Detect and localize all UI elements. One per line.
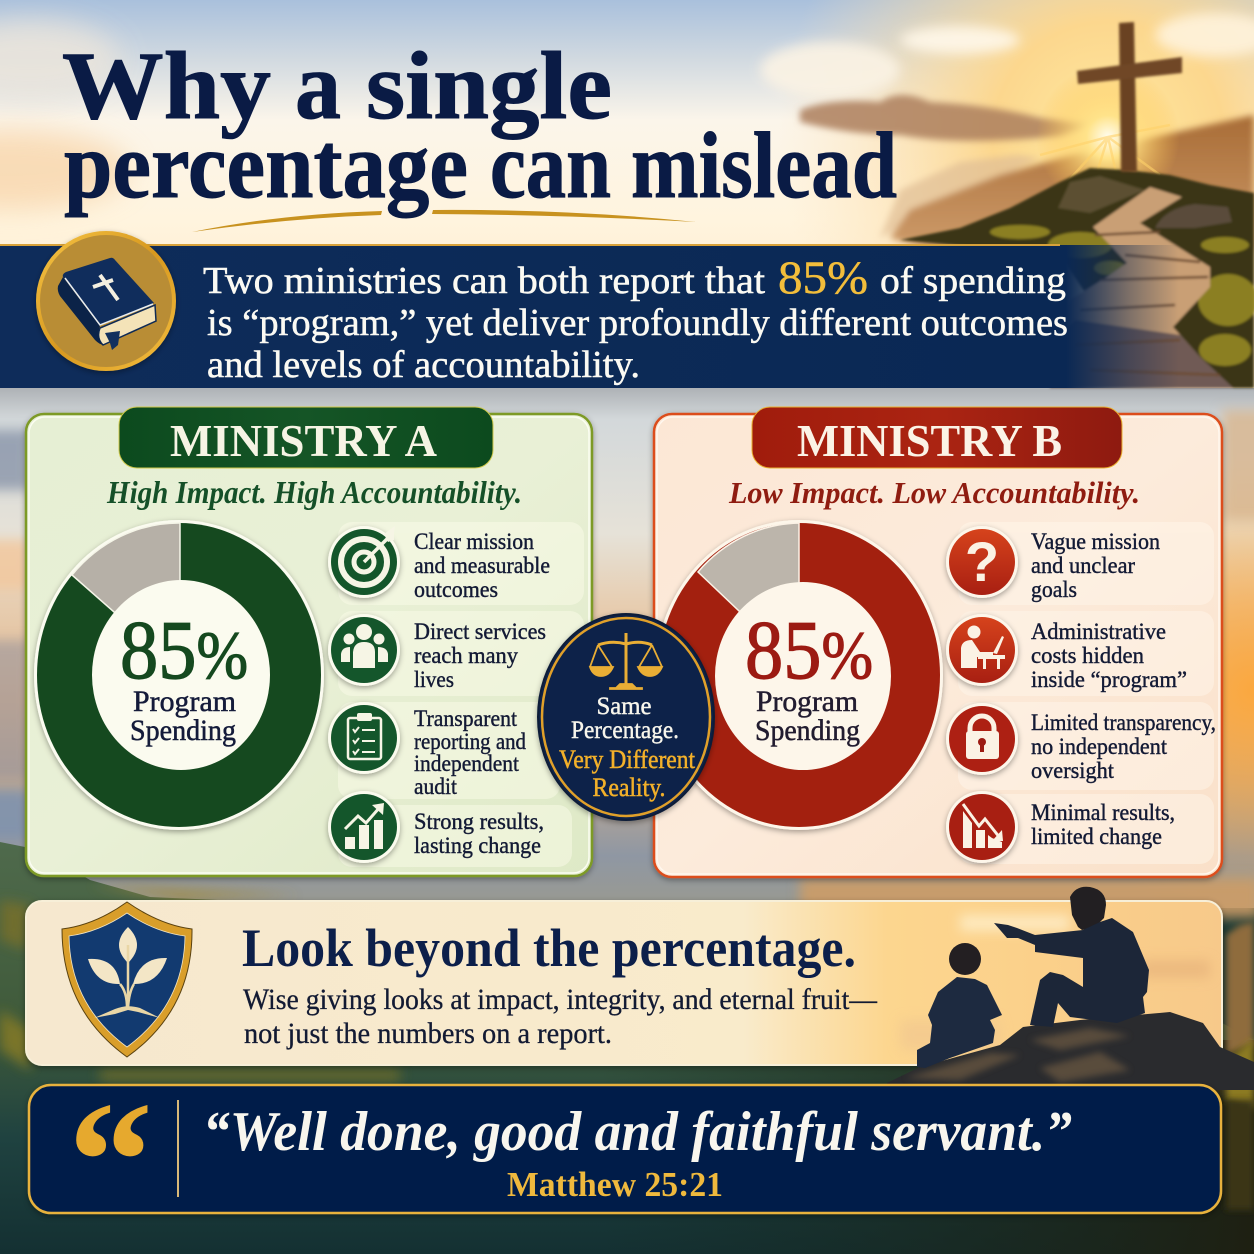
silhouette: son	[917, 943, 1002, 1068]
list item: minimal results: Minimal results,	[1031, 800, 1175, 825]
callout badge: same percentage, very different reality	[538, 614, 714, 820]
callout badge: same percentage, very different reality: Very Different	[559, 745, 696, 774]
list item: vague mission: goals	[1031, 577, 1077, 602]
list item: administrative costs: costs hidden	[1031, 643, 1144, 668]
callout badge: same percentage, very different reality: Reality.	[592, 773, 666, 802]
title: mislead	[631, 114, 897, 218]
body text: wise giving: not just the numbers on a report.	[244, 1017, 612, 1050]
list item: direct services: reach many	[414, 643, 518, 668]
list item: minimal results: limited change	[1031, 824, 1162, 849]
list item: clear mission: outcomes	[414, 577, 498, 602]
heading: Ministry A: MINISTRY A	[170, 415, 437, 466]
list item: administrative costs: Administrative	[1031, 619, 1166, 644]
panel: Ministry A	[26, 407, 592, 876]
icon: scales	[590, 633, 662, 689]
list item: vague mission	[946, 526, 1160, 602]
list item: transparent reporting: reporting and	[414, 729, 526, 754]
list item: strong results: Strong results,	[414, 809, 544, 834]
heading: Ministry B	[752, 407, 1122, 468]
donut chart: Ministry A 85%: Program	[133, 685, 236, 718]
list item: limited transparency: no independent	[1031, 734, 1168, 759]
list item: administrative costs	[946, 614, 1187, 692]
list item: transparent reporting: Transparent	[414, 706, 518, 731]
list item: direct services: Direct services	[414, 619, 546, 644]
banner text	[203, 252, 1068, 386]
heading: look beyond: Look beyond the percentage.	[242, 918, 856, 978]
list item: vague mission: ?	[965, 530, 999, 593]
donut chart: Ministry B 85%: Program	[756, 685, 858, 718]
list item: limited transparency: Limited transparency,	[1031, 710, 1216, 735]
list item: strong results: lasting change	[414, 833, 541, 858]
banner text: 85%	[778, 252, 868, 304]
icon: shield with sprout	[62, 902, 192, 1057]
list item: limited transparency	[946, 703, 1216, 783]
list item: clear mission	[328, 526, 550, 602]
illustration: father and son silhouettes on rock	[887, 887, 1254, 1090]
title: percentage	[64, 114, 468, 218]
banner text: Two ministries can both report that	[203, 260, 765, 302]
subtitle: Ministry A: High Impact. High Accountability.	[106, 474, 522, 510]
heading: Ministry B: MINISTRY B	[797, 415, 1062, 466]
banner text: and levels of accountability.	[207, 344, 640, 386]
title: single	[366, 32, 612, 139]
donut chart: Ministry A 85%: Spending	[130, 714, 236, 747]
list item: direct services	[328, 614, 546, 692]
title: can	[490, 114, 611, 218]
scripture reference: Matthew 25:21	[507, 1165, 723, 1204]
donut chart: Ministry A 85%	[34, 520, 324, 830]
body text: wise giving	[243, 983, 878, 1050]
donut chart: Ministry B 85%: Spending	[755, 714, 860, 747]
list item: clear mission: Clear mission	[414, 529, 534, 554]
row backgrounds: Ministry B	[958, 522, 1214, 864]
list item: transparent reporting: audit	[414, 774, 458, 799]
panel: look beyond the percentage	[26, 901, 1222, 1065]
list item: direct services: lives	[414, 667, 454, 692]
panel: scripture quote	[29, 1067, 1221, 1254]
list item: transparent reporting: independent	[414, 751, 520, 776]
title	[62, 32, 897, 218]
icon: quotation marks: “	[68, 1067, 153, 1254]
banner text: is “program,” yet deliver profoundly different outcomes	[207, 302, 1068, 344]
title: Why	[62, 32, 271, 139]
subtitle: Ministry B: Low Impact. Low Accountability.	[728, 475, 1140, 510]
quote text: “Well done, good and faithful servant.”	[203, 1101, 1072, 1163]
silhouette: father	[994, 887, 1149, 1027]
list item: vague mission: Vague mission	[1031, 529, 1160, 554]
illustration: cross on hill at sunrise with stone path	[800, 22, 1254, 388]
list item: vague mission: and unclear	[1031, 553, 1135, 578]
donut chart: Ministry A 85%: 85%	[120, 604, 248, 697]
panel: Ministry B	[654, 407, 1222, 877]
icon: bible medallion	[38, 233, 174, 369]
list item: transparent reporting	[328, 702, 526, 799]
list item: clear mission: and measurable	[414, 553, 550, 578]
row backgrounds: Ministry A	[338, 522, 584, 867]
title: a	[295, 32, 341, 139]
list item: strong results	[328, 791, 544, 863]
callout badge: same percentage, very different reality: Same	[596, 693, 652, 720]
decorative gold swoosh under title	[192, 210, 696, 232]
list item: limited transparency: oversight	[1031, 758, 1115, 783]
donut chart: Ministry B 85%	[655, 520, 943, 830]
list item: minimal results	[946, 791, 1175, 863]
banner text: of spending	[880, 260, 1066, 302]
donut chart: Ministry B 85%: 85%	[745, 604, 873, 697]
callout badge: same percentage, very different reality: Percentage.	[571, 717, 679, 744]
list item: administrative costs: inside “program”	[1031, 667, 1187, 692]
heading: Ministry A	[119, 407, 493, 468]
intro banner	[0, 244, 1254, 388]
icon: wooden cross	[1077, 22, 1182, 172]
body text: wise giving: Wise giving looks at impact, integrity, and eternal fruit—	[243, 983, 878, 1016]
